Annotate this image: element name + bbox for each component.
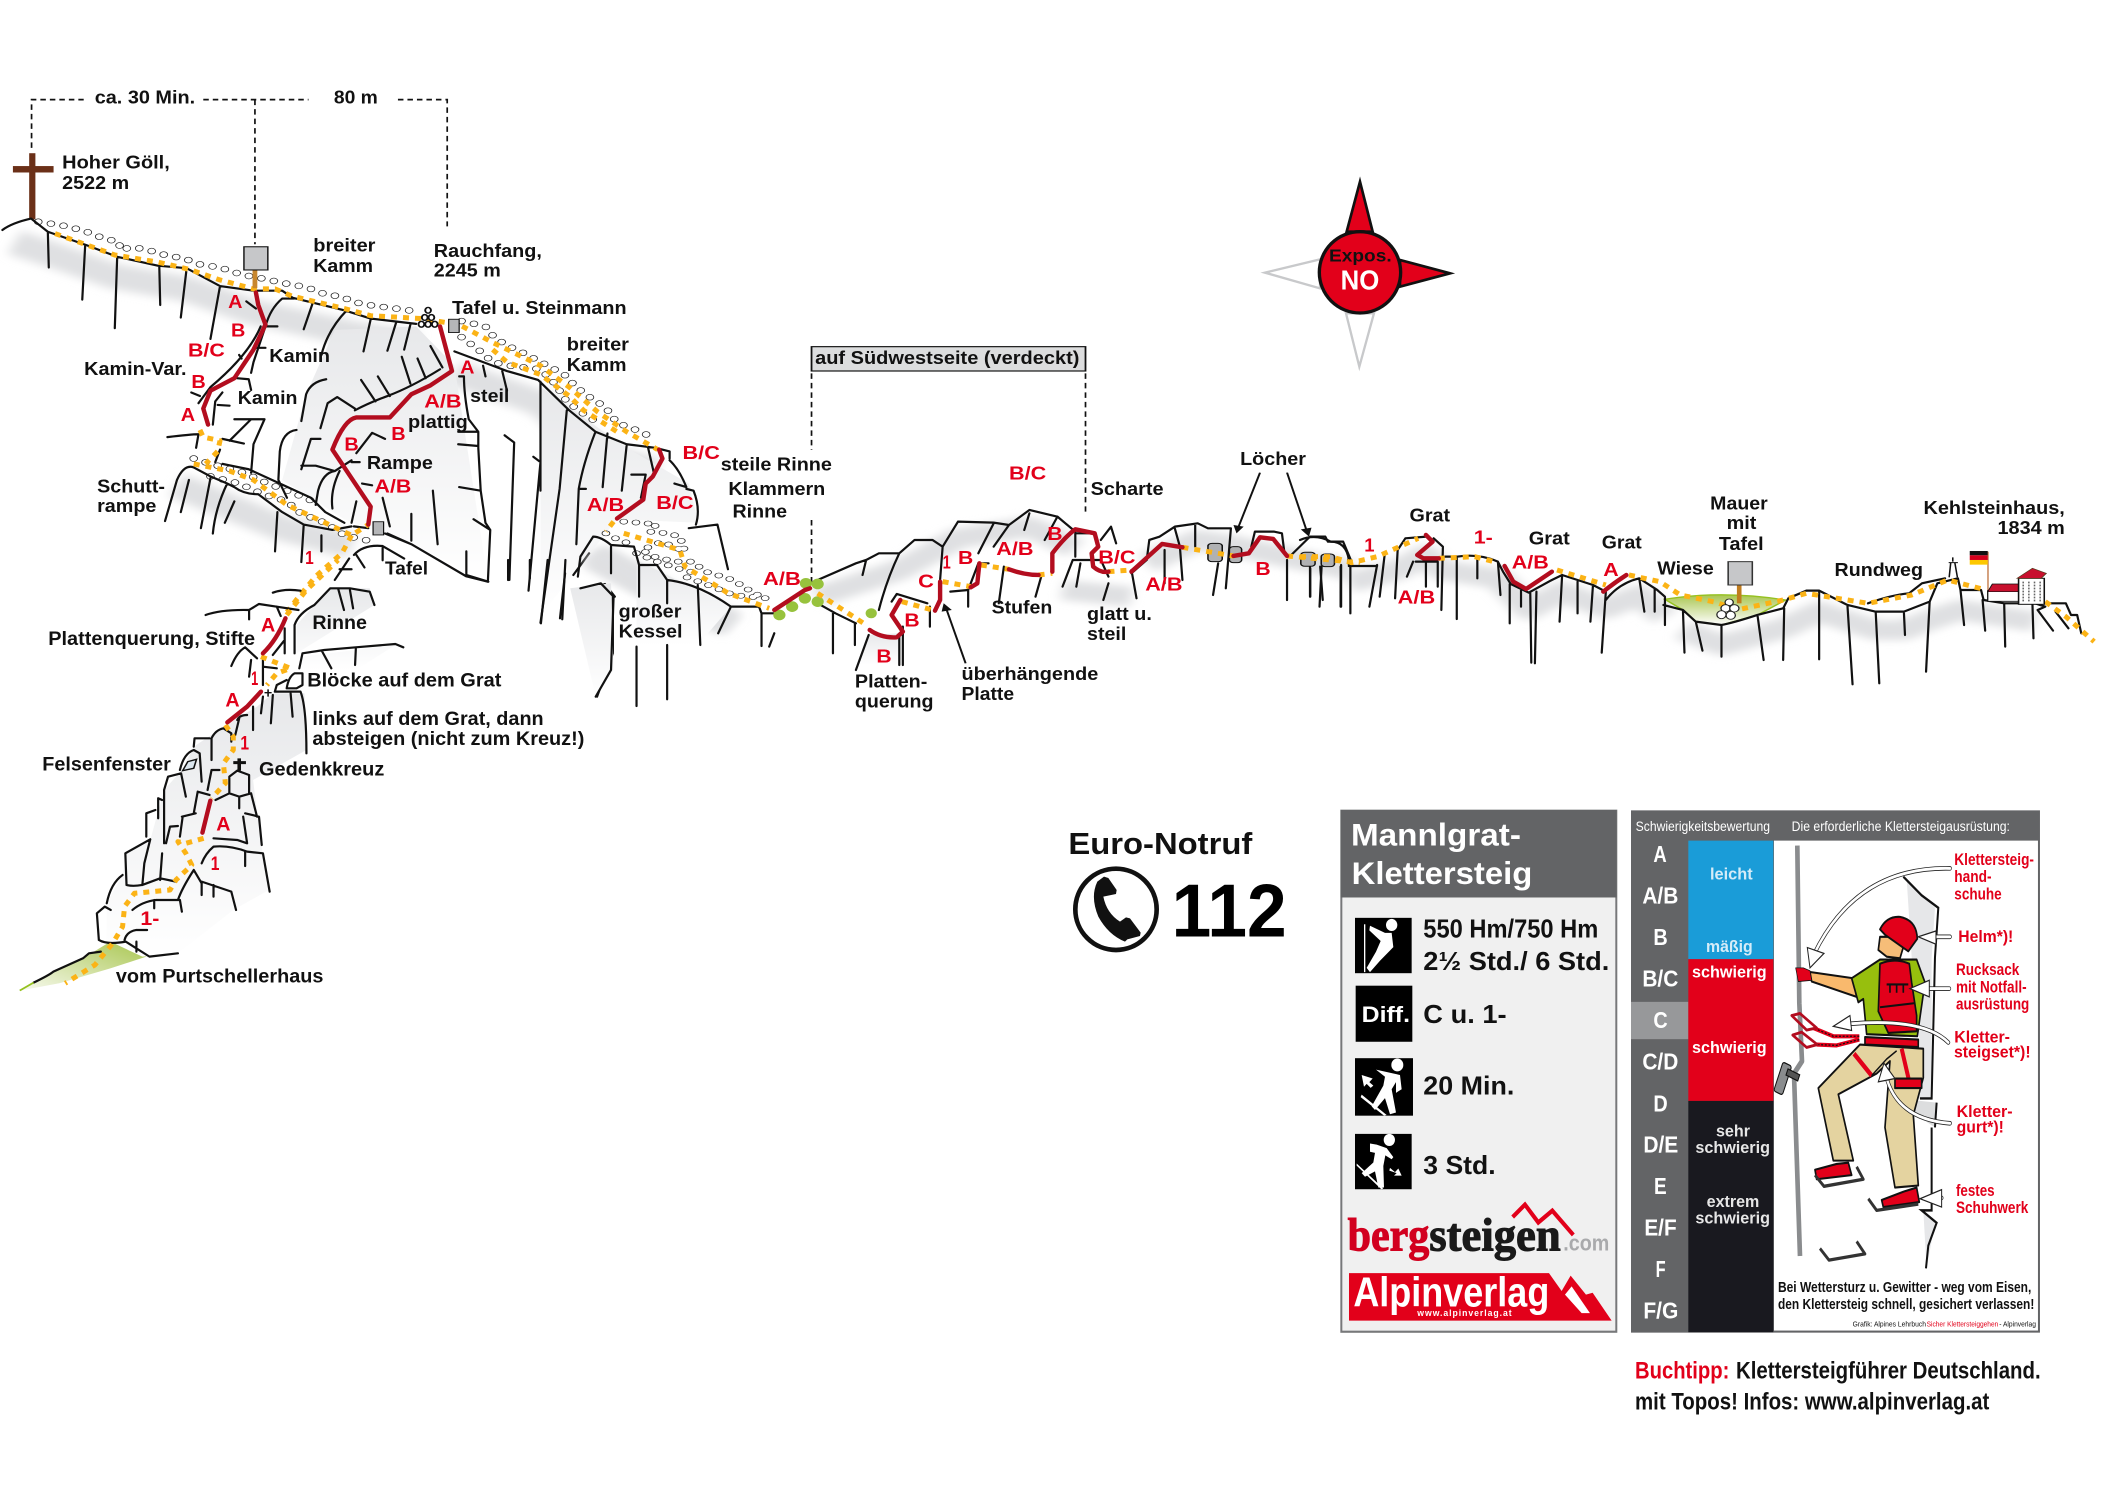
panel: Mannlgrat-Klettersteig facts [1341, 810, 1617, 1332]
route feature labels: Kamin [269, 345, 330, 366]
label: Mauer mit Tafel: mit [1727, 513, 1756, 534]
dimension bracket [32, 100, 447, 244]
equipment labels: Schuhwerk [1956, 1199, 2029, 1217]
descent time: 3 Std. [1423, 1151, 1496, 1180]
difficulty grades: C [918, 571, 934, 592]
difficulty grades: 1 [211, 854, 220, 875]
meadow [20, 943, 146, 991]
difficulty grades: B [231, 319, 245, 341]
icon: summit cross [13, 153, 54, 219]
label: großer Kessel: großer [619, 601, 682, 622]
difficulty grades: B [344, 433, 359, 455]
icon: difficulty: Diff. [1362, 1002, 1410, 1027]
difficulty grades: B [1255, 559, 1271, 580]
small signs [373, 319, 459, 535]
storm warning: den Klettersteig schnell, gesichert verlassen! [1778, 1296, 2034, 1312]
walking route [606, 522, 1360, 625]
difficulty grades: 1- [1474, 527, 1493, 548]
equipment labels: festes [1956, 1182, 1995, 1200]
difficulty grades: B/C [1098, 547, 1136, 568]
rock face lines [560, 510, 1351, 706]
logo: Alpinverlag: Alpinverlag [1353, 1270, 1549, 1316]
difficulty grades: A [460, 357, 475, 378]
difficulty band: very difficult to extreme: sehr [1716, 1122, 1750, 1141]
arm [1810, 972, 1857, 997]
difficulty band: very difficult to extreme: extrem [1707, 1193, 1759, 1211]
equipment labels: gurt*)! [1957, 1118, 2004, 1137]
backpack [1878, 961, 1917, 1033]
label: Rauchfang: Rauchfang, [434, 240, 542, 261]
label: Plattenquerung [855, 671, 933, 712]
walking route [1300, 538, 2094, 642]
approach time: 20 Min. [1423, 1072, 1514, 1101]
difficulty band: easy to moderate [1688, 841, 1773, 959]
grade scale [1642, 842, 1678, 1324]
equipment labels: Kletter- [1957, 1103, 2013, 1122]
icon: difficulty [1356, 986, 1412, 1042]
via ferrata set [1792, 1013, 1859, 1047]
equipment labels [1954, 851, 2034, 1217]
labels: Grat [1409, 506, 1642, 553]
note: route hint [312, 709, 584, 750]
labels: Grat: Grat [1409, 506, 1450, 526]
route feature labels: steil [470, 385, 509, 406]
route feature labels: Schutt- [97, 476, 165, 497]
exposure label: Expos. [1329, 246, 1392, 266]
note: route hint: links auf dem Grat, dann [312, 709, 544, 730]
column headings: Schwierigkeitsbewertung [1636, 819, 1770, 834]
difficulty grades: 1- [140, 909, 159, 930]
rock face lines [2, 219, 728, 623]
route feature labels: Tafel [385, 558, 428, 579]
rock face lines [34, 553, 615, 983]
labels: gully: steile Rinne [721, 454, 832, 475]
book tip: Klettersteigführer Deutschland. [1736, 1357, 2041, 1384]
route feature labels: Blöcke auf dem Grat [307, 670, 501, 691]
label: breiter Kamm: Kamm [313, 255, 373, 276]
elevation and time: 550 Hm/750 Hm [1423, 915, 1598, 944]
callout: auf Südwestseite: auf Südwestseite (verdeckt) [815, 348, 1079, 369]
via ferrata walking route [55, 234, 658, 612]
difficulty grades: A [181, 404, 195, 425]
column headings: Die erforderliche Klettersteigausrüstung: [1792, 819, 2010, 834]
label: Rauchfang [434, 240, 542, 281]
label: Mauer mit Tafel: Tafel [1719, 534, 1764, 555]
rock shading [593, 527, 1351, 623]
number 112: 112 [1172, 869, 1287, 953]
difficulty grades: 1 [1364, 535, 1375, 556]
secured sections [774, 529, 1287, 637]
difficulty value: C u. 1- [1423, 1000, 1507, 1029]
secured climbing sections [203, 292, 662, 525]
difficulty grades: A/B [996, 539, 1033, 560]
grade scale: B [1653, 925, 1668, 951]
label: glatt u. steil: glatt u. [1087, 604, 1152, 625]
difficulty grades: A [261, 615, 275, 636]
grade scale: B/C [1642, 967, 1678, 992]
scree stones on ridge [38, 222, 655, 541]
book tip: Buchtipp: [1635, 1357, 1729, 1384]
difficulty band: very difficult to extreme: schwierig [1695, 1139, 1770, 1158]
exposure value: NO [1341, 264, 1379, 295]
difficulty band: easy to moderate: mäßig [1706, 938, 1753, 957]
label: Kehlsteinhaus: 1834 m [1997, 518, 2065, 539]
grade scale: A/B [1642, 884, 1678, 909]
label: überhängende Platte [962, 664, 1098, 705]
note: route hint: absteigen (nicht zum Kreuz!) [312, 729, 584, 750]
image credit [1853, 1321, 2036, 1329]
rock wall [1903, 877, 1938, 1268]
image credit: Sicher Klettersteiggehen [1927, 1321, 1999, 1329]
equipment labels: schuhe [1954, 885, 2002, 904]
difficulty grades: B/C [656, 492, 694, 513]
label: breiter Kamm 2: Kamm [567, 354, 627, 375]
compass: exposure NO [1265, 182, 1450, 367]
stones at sign [1717, 599, 1739, 619]
label: Löcher: Löcher [1240, 449, 1306, 470]
difficulty grades: B/C [188, 340, 225, 361]
difficulty grades: A/B [1398, 587, 1435, 608]
difficulty grades: B/C [1009, 463, 1046, 484]
equipment labels: Kletter- [1954, 1028, 2010, 1047]
summit label [62, 152, 170, 193]
logo: Alpinverlag: www.alpinverlag.at [1416, 1308, 1512, 1318]
label: großer Kessel [619, 601, 682, 642]
label: Plattenquerung: querung [855, 691, 933, 712]
elevation and time: 2½ Std./ 6 Std. [1423, 947, 1609, 976]
route feature labels: rampe [97, 495, 156, 516]
label: Rauchfang: 2245 m [434, 260, 501, 281]
grade scale: E [1654, 1174, 1667, 1200]
column headings [1636, 819, 2010, 834]
label: Tafel u. Steinmann: Tafel u. Steinmann [452, 297, 627, 318]
icon: telephone [1075, 869, 1157, 950]
grade scale: F/G [1643, 1299, 1678, 1324]
bracket for hidden section [812, 373, 1086, 583]
meadow [1665, 595, 1786, 625]
difficulty grades: A [228, 291, 243, 312]
difficulty grades: B [391, 423, 406, 444]
icon: small cross [265, 689, 272, 697]
icon: approach [1355, 1058, 1413, 1116]
scree stones [606, 522, 767, 598]
secured sections [202, 618, 285, 833]
icon: climber on cable [1355, 918, 1412, 973]
difficulty grades: A/B [424, 391, 462, 412]
difficulty band: easy to moderate: leicht [1710, 865, 1753, 884]
grade scale: A [1653, 842, 1667, 868]
image credit: Grafik: Alpines Lehrbuch [1853, 1321, 1926, 1329]
icon: descent [1355, 1134, 1412, 1189]
difficulty grades [1364, 527, 1619, 608]
belt [1865, 1037, 1918, 1047]
difficulty grades: B [958, 548, 973, 569]
shoes [1815, 1163, 1919, 1207]
label: überhängende Platte: Platte [962, 684, 1014, 705]
route feature labels: Rampe [367, 452, 433, 473]
panel header: Klettersteig [1352, 856, 1532, 891]
labels: Felsenfenster, Gedenkkreuz, start: Felsenfenster [42, 754, 171, 775]
meadow edge [20, 983, 34, 991]
equipment labels: ausrüstung [1956, 995, 2029, 1014]
label: breiter Kamm [313, 234, 376, 276]
label: Wiese: Wiese [1657, 558, 1714, 579]
rock shading [14, 242, 732, 625]
image credit: - Alpinverlag [1999, 1321, 2036, 1329]
book tip: mit Topos! Infos: www.alpinverlag.at [1635, 1387, 1989, 1415]
sign post [244, 247, 268, 288]
difficulty band: difficult: schwierig [1692, 1039, 1767, 1057]
route feature labels: plattig [408, 411, 468, 432]
height label: 80 m [334, 87, 378, 108]
arrow: to Löcher right [1287, 473, 1312, 537]
difficulty grades: A [1603, 560, 1619, 581]
arrows to equipment [1807, 868, 1950, 1207]
logo: bergsteigen.com [1348, 1205, 1609, 1261]
labels: Grat: Grat [1602, 532, 1642, 553]
storm warning: Bei Wettersturz u. Gewitter - weg vom Eisen, [1778, 1279, 2031, 1295]
sign: wall plaque [1728, 562, 1752, 603]
rock shading [1349, 555, 2035, 645]
difficulty grades: B [191, 371, 206, 392]
grade scale: D [1653, 1091, 1668, 1117]
heading: Euro-Notruf: Euro-Notruf [1068, 827, 1253, 861]
panel background [1631, 810, 2040, 1333]
difficulty band: very difficult to extreme [1688, 1101, 1773, 1332]
panel header: Mannlgrat- [1351, 818, 1521, 853]
equipment labels: Rucksack [1956, 961, 2020, 979]
difficulty grades: A/B [763, 569, 801, 590]
grade scale: E/F [1644, 1216, 1677, 1241]
equipment labels: hand- [1954, 868, 1992, 886]
label: glatt u. steil [1087, 604, 1152, 645]
face [1878, 937, 1903, 958]
difficulty grades: B [1047, 524, 1063, 545]
glove [1796, 968, 1812, 982]
labels: gully: Rinne [732, 501, 787, 522]
rock face lines [1300, 537, 2081, 684]
label: Plattenquerung: Platten- [855, 671, 927, 692]
label: breiter Kamm: breiter [313, 234, 376, 256]
route feature labels: Rinne [312, 613, 367, 634]
equipment labels: steigset*)! [1954, 1043, 2031, 1062]
topo section: lower ascent from Purtschellerhaus [20, 553, 615, 991]
difficulty grades: A/B [1145, 574, 1182, 595]
helmet [1880, 917, 1917, 951]
label: Mauer mit Tafel [1710, 493, 1768, 555]
difficulty grades [763, 463, 1271, 667]
difficulty grades: A [216, 814, 231, 835]
backpack straps [1880, 984, 1915, 1007]
grade scale: D/E [1643, 1133, 1678, 1158]
book tip [1635, 1357, 2041, 1415]
compass disc [1319, 232, 1401, 313]
equipment labels: Klettersteig- [1954, 851, 2034, 869]
summit label: Hoher Göll, [62, 152, 170, 173]
difficulty grades [140, 615, 275, 930]
route feature labels: Kamin [238, 387, 298, 408]
difficulty grades: A [225, 690, 240, 711]
difficulty grades: 1 [240, 733, 249, 754]
emergency number [1068, 827, 1287, 953]
icon: rock window [183, 759, 197, 771]
label: glatt u. steil: steil [1087, 624, 1126, 645]
rock shading [107, 693, 306, 957]
difficulty grades: B [904, 610, 920, 631]
climbing brake [1774, 1062, 1801, 1100]
grade scale: F [1656, 1257, 1666, 1283]
difficulty grades: 1 [251, 669, 258, 690]
vegetation [773, 578, 877, 620]
logo: bergsteigen.com: steigen [1429, 1209, 1561, 1261]
labels: Felsenfenster, Gedenkkreuz, start: vom Purtschellerhaus [116, 966, 323, 987]
labels: Felsenfenster, Gedenkkreuz, start: Gedenkkreuz [259, 759, 384, 780]
rock holes [1208, 543, 1334, 567]
difficulty grades: A/B [375, 476, 411, 497]
harness leg loop [1895, 1079, 1922, 1088]
difficulty grades: 1 [305, 547, 314, 568]
icon: cairn [419, 307, 438, 327]
difficulty grades: A/B [587, 494, 624, 515]
arrow: to Löcher left [1233, 473, 1260, 533]
label: großer Kessel: Kessel [619, 621, 682, 642]
label: Mauer mit Tafel: Mauer [1710, 493, 1768, 514]
label: Scharte: Scharte [1091, 479, 1164, 500]
labels: Grat: Grat [1529, 528, 1570, 549]
compass points [1265, 182, 1450, 367]
route feature labels: Plattenquerung, Stifte [48, 629, 255, 650]
panel background [1341, 811, 1616, 1332]
route feature labels [48, 613, 501, 691]
label: breiter Kamm 2: breiter [567, 334, 629, 355]
pants [1818, 1045, 1923, 1188]
label: Kehlsteinhaus [1923, 498, 2065, 539]
labels: gully: Klammern [728, 479, 825, 500]
label: breiter Kamm 2 [567, 334, 629, 375]
harness straps [1854, 1049, 1909, 1082]
icon: Kehlsteinhaus building [1988, 568, 2046, 604]
label: Rundweg: Rundweg [1835, 560, 1923, 581]
logo: bergsteigen.com: berg [1348, 1209, 1429, 1261]
icon: german flag [1970, 551, 1989, 597]
equipment labels: mit Notfall- [1956, 978, 2027, 997]
difficulty grades: 1 [943, 552, 951, 573]
labels: Felsenfenster, Gedenkkreuz, start [42, 754, 384, 987]
step irons [1815, 1167, 1918, 1260]
panel: difficulty scale and equipment [1631, 810, 2041, 1415]
grade scale: C [1653, 1008, 1668, 1033]
route feature labels [84, 345, 509, 579]
icon: climber [1796, 917, 1925, 1207]
secured sections [1417, 535, 1626, 592]
storm warning [1778, 1279, 2034, 1312]
label: Stufen: Stufen [992, 597, 1052, 618]
equipment labels: Helm*)! [1958, 928, 2013, 947]
harness strap outline [1872, 1051, 1897, 1076]
shirt [1852, 960, 1925, 1036]
difficulty band: very difficult to extreme: schwierig [1695, 1209, 1770, 1228]
difficulty grades [181, 291, 720, 568]
panel header [1341, 810, 1617, 897]
walking route [65, 560, 338, 983]
labels: gully [721, 454, 832, 522]
topo section: summit ridge and Rauchfang [2, 87, 732, 625]
topo section: ridge to Kehlsteinhaus [1300, 493, 2094, 684]
icon: memorial cross [233, 758, 246, 771]
topo section: Kessel, Rinne, hidden SW side, Löcher [560, 347, 1360, 712]
current grade highlight [1631, 1002, 1688, 1039]
callout: auf Südwestseite [812, 347, 1086, 371]
summit label: 2522 m [62, 172, 129, 193]
difficulty grades: B/C [683, 442, 720, 463]
label: überhängende Platte: überhängende [962, 664, 1098, 685]
elevation and time [1423, 915, 1609, 976]
time label: ca. 30 Min. [95, 87, 195, 108]
arrow: overhanging slab [942, 603, 966, 663]
difficulty band: difficult: schwierig [1692, 963, 1767, 982]
difficulty grades: B [876, 646, 892, 667]
difficulty band: difficult [1688, 959, 1773, 1101]
difficulty grades: A/B [1512, 552, 1549, 573]
equipment area [1774, 841, 2038, 1331]
cable [1794, 846, 1802, 1256]
grade scale: C/D [1642, 1050, 1678, 1075]
logo: bergsteigen.com: .com [1563, 1231, 1609, 1256]
icon: summit antenna [1949, 557, 1958, 577]
route feature labels: Kamin-Var. [84, 358, 187, 379]
